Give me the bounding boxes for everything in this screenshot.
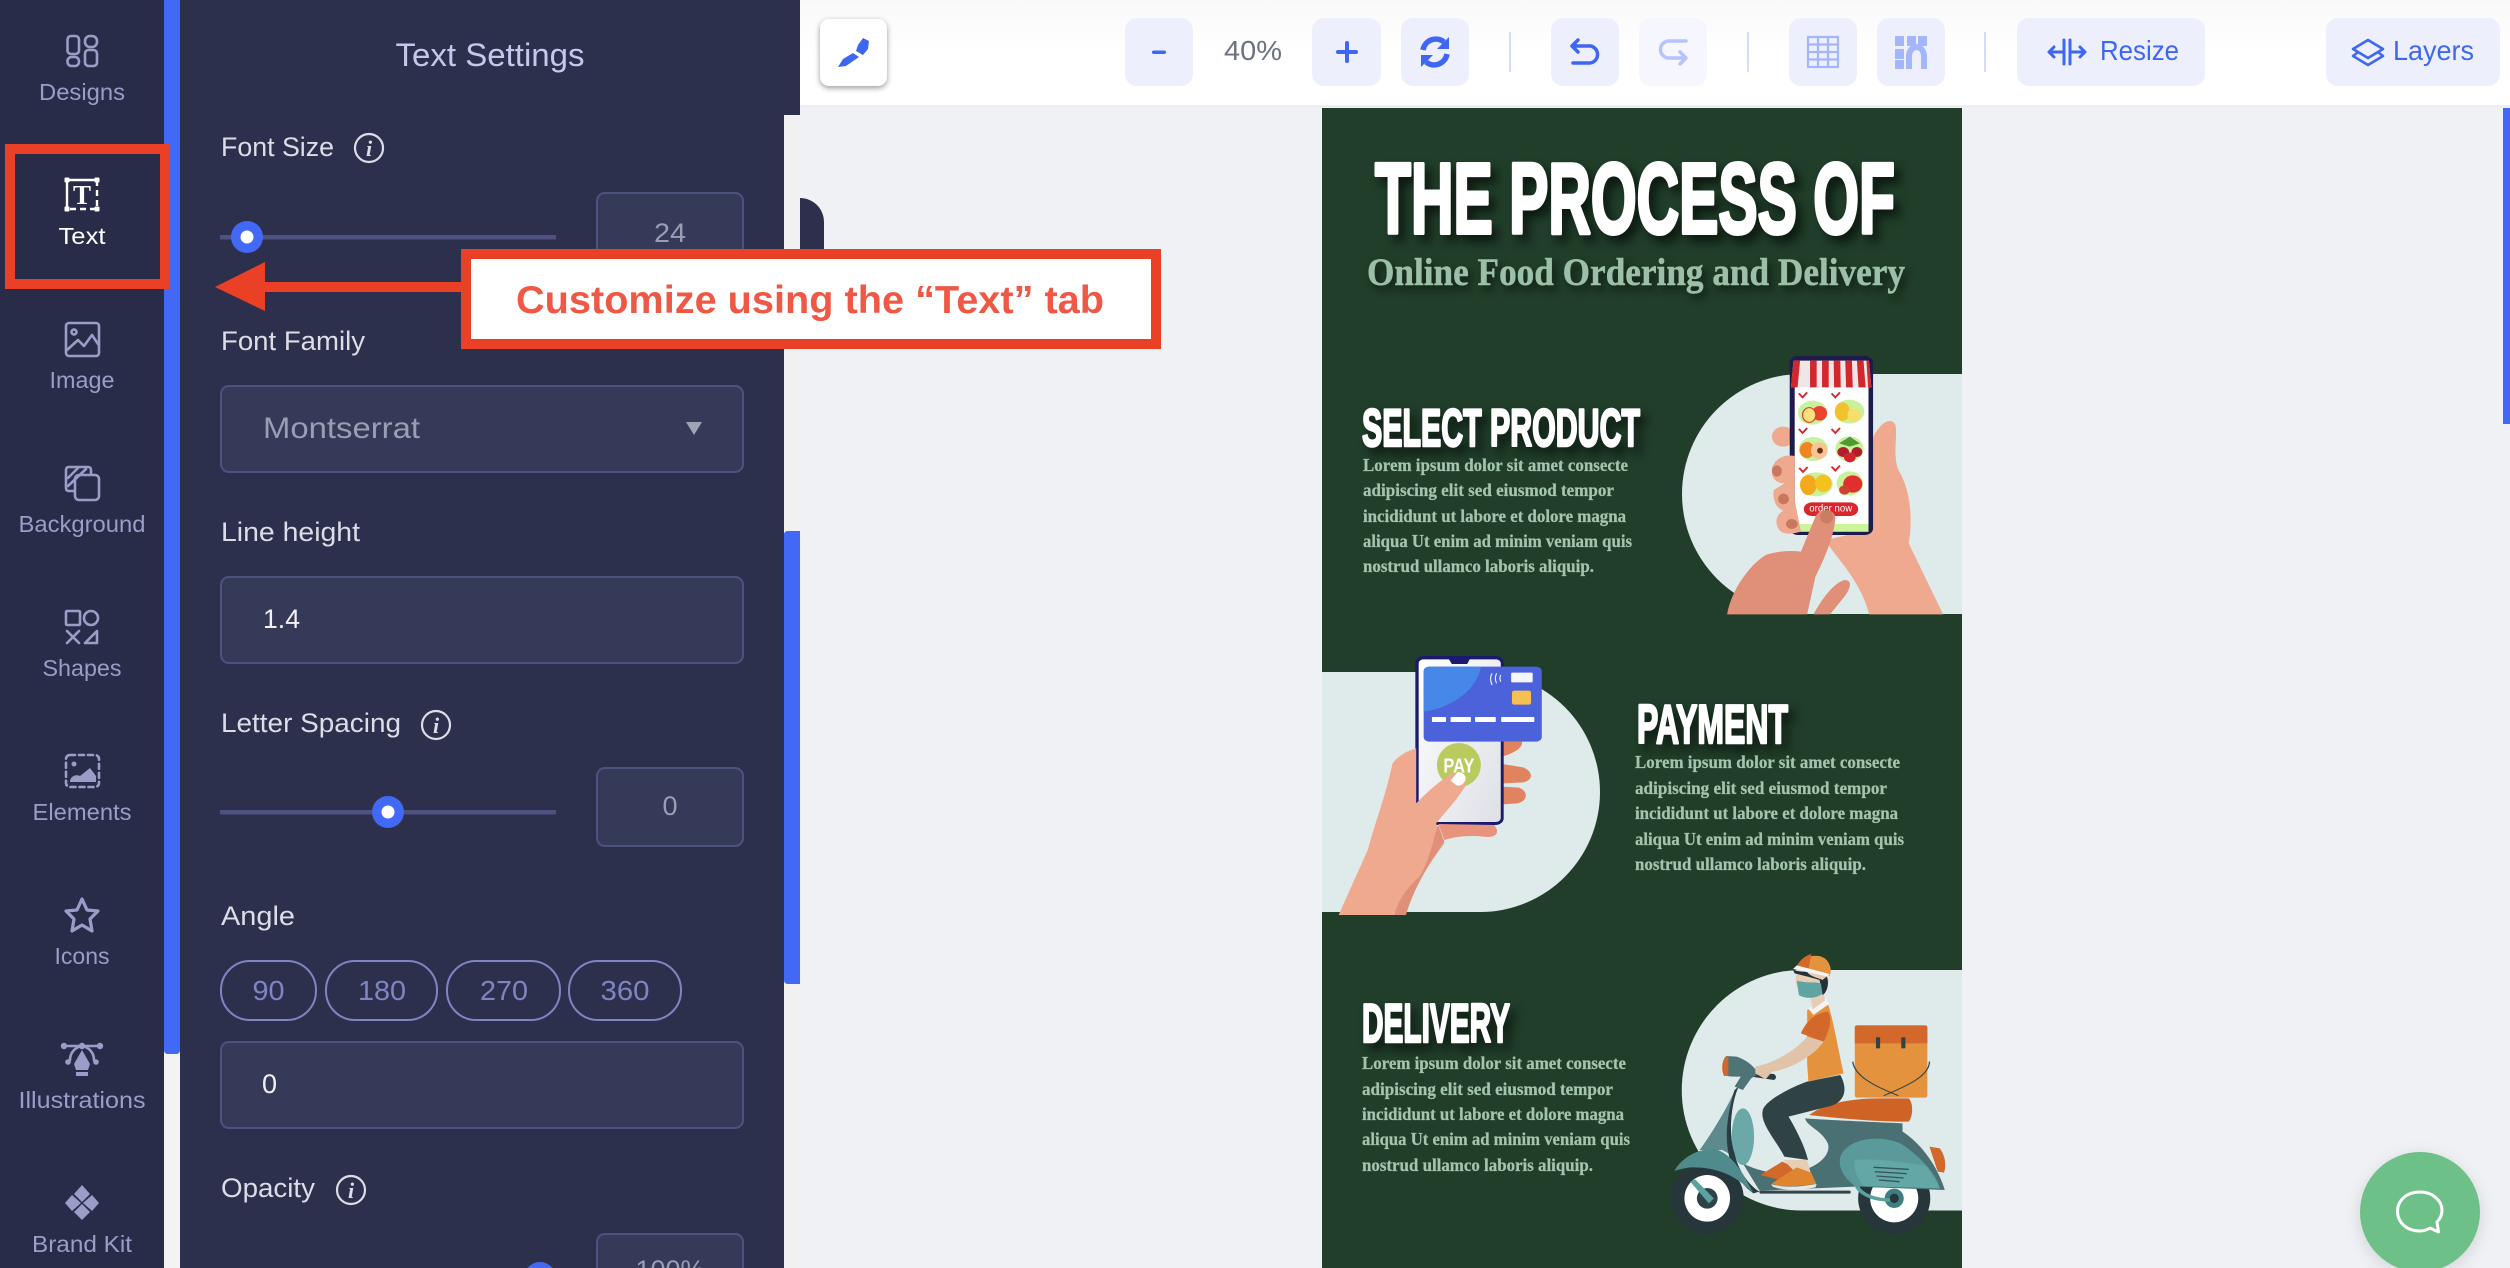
- chat button: [2360, 1152, 2480, 1268]
- text block: select product body: nostrud ullamco laboris aliquip.: [1363, 556, 1594, 576]
- refresh button: [1401, 18, 1469, 86]
- redo button: [1639, 18, 1707, 86]
- rider: [1762, 1075, 1844, 1160]
- nav: designs: [39, 36, 125, 105]
- zoom out button: [1125, 18, 1193, 86]
- holding hand: [1826, 421, 1943, 614]
- right scrollbar: [2503, 108, 2510, 424]
- text block: payment body: [1635, 752, 1904, 874]
- nav: text (active): T: [73, 180, 91, 210]
- text block: payment body: Lorem ipsum dolor sit amet consecte: [1635, 752, 1900, 772]
- phone body: [1790, 356, 1873, 535]
- nav: designs: Designs: [39, 79, 125, 105]
- text block: select product body: Lorem ipsum dolor sit amet consecte: [1363, 455, 1628, 475]
- heading: text settings: Text Settings: [396, 37, 584, 73]
- sidebar scrollbar: [164, 0, 180, 1268]
- control: opacity: Opacity: [221, 1173, 315, 1203]
- illustration: hands holding phone: [1682, 356, 1962, 614]
- control: letter spacing: [220, 708, 743, 846]
- control: line height: 1.4: [263, 604, 300, 634]
- text block: payment body: adipiscing elit sed eiusmod tempor: [1635, 778, 1887, 798]
- pay button: [1437, 743, 1481, 787]
- order now button: [1804, 502, 1858, 516]
- heading: select product: SELECT PRODUCT: [1362, 399, 1640, 458]
- nav: brand kit: Brand Kit: [32, 1231, 133, 1257]
- front shield and fender: [1699, 1087, 1739, 1157]
- nav: image: Image: [50, 367, 114, 393]
- control: font family: Montserrat: [263, 412, 421, 445]
- fruit grid: [1798, 400, 1864, 496]
- zoom level: 40%: [1224, 35, 1282, 66]
- control: font size: i: [366, 136, 373, 161]
- control: angle: 0: [262, 1069, 277, 1099]
- control: angle: Angle: [221, 901, 295, 931]
- canvas background: [784, 108, 2510, 1268]
- hand: [1438, 824, 1497, 840]
- text block: delivery body: [1362, 1053, 1630, 1175]
- panel collapse tab: [800, 198, 824, 270]
- nav: brand kit: [32, 1185, 133, 1257]
- text block: select product body: aliqua Ut enim ad minim veniam quis: [1363, 531, 1632, 551]
- scooter rear body: [1929, 1147, 1945, 1173]
- panel: text settings: [180, 0, 800, 1268]
- title: THE PROCESS OF: [1375, 143, 1895, 255]
- text block: select product body: adipiscing elit sed eiusmod tempor: [1363, 480, 1614, 500]
- resize button: Resize: [2100, 35, 2179, 66]
- layers button: [2326, 18, 2500, 86]
- nav: icons: Icons: [54, 943, 110, 969]
- text block: delivery body: incididunt ut labore et dolore magna: [1362, 1104, 1624, 1124]
- control: angle: [221, 901, 743, 1128]
- illustration: hand with phone and card: [1322, 656, 1600, 915]
- undo button: [1551, 18, 1619, 86]
- text block: delivery body: nostrud ullamco laboris aliquip.: [1362, 1155, 1593, 1175]
- text block: delivery body: Lorem ipsum dolor sit amet consecte: [1362, 1053, 1626, 1073]
- section: delivery: [1362, 954, 1962, 1234]
- awning: [1791, 361, 1871, 387]
- control: opacity: [221, 1173, 743, 1268]
- layers button: Layers: [2393, 35, 2474, 66]
- control: font size: 24: [654, 218, 686, 248]
- top toolbar: [800, 0, 2510, 108]
- text block: delivery body: aliqua Ut enim ad minim veniam quis: [1362, 1129, 1630, 1149]
- control: font size: [220, 132, 743, 273]
- shoes: [1760, 1162, 1797, 1180]
- card: [1424, 667, 1542, 742]
- control: letter spacing: 0: [662, 791, 678, 821]
- fingers behind phone edge: [1772, 455, 1801, 534]
- nav: icons: [54, 899, 110, 969]
- control: font family: Font Family: [221, 326, 366, 356]
- nav: text (active): [58, 178, 106, 249]
- arrow: callout to text tab: [215, 262, 461, 311]
- heading: delivery: DELIVERY: [1362, 992, 1510, 1054]
- illustration: hand with phone and card: PAY: [1443, 755, 1474, 777]
- text block: payment body: nostrud ullamco laboris aliquip.: [1635, 854, 1866, 874]
- nav: illustrations: Illustrations: [18, 1087, 146, 1113]
- panel scrollbar: [784, 115, 800, 1268]
- text block: select product body: incididunt ut labore et dolore magna: [1363, 506, 1626, 526]
- pointing hand: [1727, 510, 1835, 614]
- nav: background: Background: [18, 511, 146, 537]
- delivery box: [1855, 1025, 1927, 1098]
- phone: [1415, 656, 1504, 825]
- head: [1796, 963, 1829, 997]
- nav: background: [18, 467, 146, 537]
- control: line height: [221, 517, 743, 663]
- control: font size: Font Size: [221, 132, 334, 162]
- nav: illustrations: [18, 1043, 146, 1113]
- wheels: [1858, 1162, 1930, 1234]
- zoom in button: [1312, 18, 1381, 86]
- callout: Customize using the “Text” tab: [516, 279, 1104, 322]
- control: angle: 360: [600, 975, 650, 1006]
- icon: eyedropper button: [820, 19, 887, 86]
- infographic canvas: [1322, 108, 1962, 1268]
- section: payment: [1322, 656, 1904, 915]
- control: angle: 180: [358, 975, 406, 1006]
- seat: [1809, 1098, 1912, 1122]
- callout: [466, 254, 1156, 344]
- illustration: hands holding phone: order now: [1809, 504, 1853, 515]
- grid button: [1789, 18, 1857, 86]
- text block: delivery body: adipiscing elit sed eiusmod tempor: [1362, 1079, 1613, 1099]
- highlight box: text tab: [10, 149, 165, 284]
- nav: text (active): Text: [58, 223, 106, 249]
- control: opacity: i: [348, 1178, 355, 1203]
- nav: image: [50, 323, 114, 393]
- illustration: scooter courier: [1671, 954, 1962, 1234]
- control: letter spacing: Letter Spacing: [221, 708, 401, 738]
- control: font family: [221, 326, 743, 472]
- control: line height: Line height: [221, 517, 361, 547]
- nav: shapes: Shapes: [42, 655, 122, 681]
- text block: payment body: aliqua Ut enim ad minim veniam quis: [1635, 829, 1904, 849]
- section: select product: [1362, 356, 1962, 614]
- nav: elements: [32, 755, 132, 825]
- heading: payment: PAYMENT: [1637, 693, 1788, 755]
- nav: shapes: [42, 611, 122, 681]
- panel: left icon sidebar: [0, 0, 164, 1268]
- control: angle: 90: [252, 975, 284, 1006]
- control: letter spacing: i: [433, 713, 440, 738]
- snap button: [1877, 18, 1945, 86]
- back fingers: [1502, 742, 1531, 804]
- nav: elements: Elements: [32, 799, 132, 825]
- resize button: [2017, 18, 2205, 86]
- control: angle: 270: [480, 975, 528, 1006]
- text block: payment body: incididunt ut labore et dolore magna: [1635, 803, 1898, 823]
- subtitle: Online Food Ordering and Delivery: [1367, 251, 1905, 294]
- handlebar: [1751, 1073, 1776, 1080]
- text block: select product body: [1363, 455, 1632, 576]
